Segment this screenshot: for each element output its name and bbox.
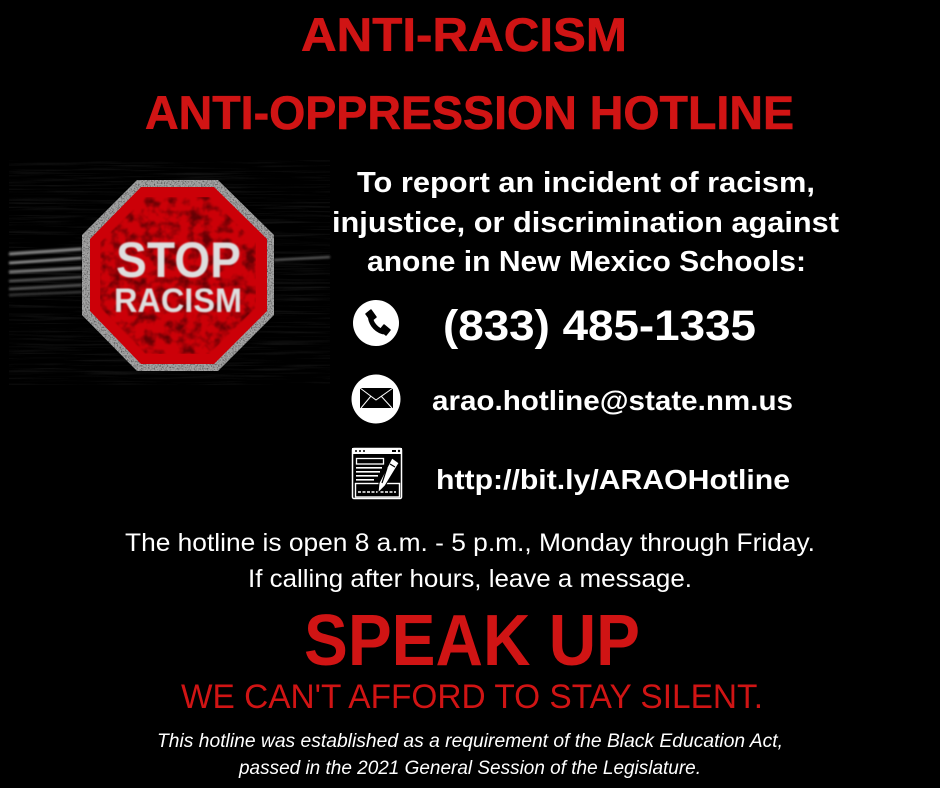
- hours text: If calling after hours, leave a message.: [248, 565, 692, 593]
- title: ANTI-RACISM: [301, 8, 627, 61]
- email: arao.hotline@state.nm.us: [432, 385, 793, 416]
- sign text: RACISM: [114, 282, 242, 320]
- intro text: anone in New Mexico Schools:: [367, 246, 806, 278]
- intro text: injustice, or discrimination against: [332, 207, 839, 239]
- octagon: [82, 180, 274, 371]
- icon: phone: [353, 300, 399, 346]
- title: ANTI-OPPRESSION HOTLINE: [145, 86, 794, 139]
- icon: envelope: [352, 374, 400, 424]
- title: [145, 8, 794, 139]
- footnote: This hotline was established as a requirement of the Black Education Act,: [157, 731, 783, 752]
- hours text: The hotline is open 8 a.m. - 5 p.m., Monday through Friday.: [125, 529, 815, 557]
- phone number: (833) 485-1335: [443, 302, 756, 350]
- image: stop racism sign: [9, 160, 330, 385]
- sign text: [114, 232, 242, 320]
- icon: web form and pencil: [352, 448, 402, 498]
- intro text: To report an incident of racism,: [357, 167, 815, 199]
- footnote: [157, 731, 783, 779]
- sign text: STOP: [116, 232, 241, 288]
- intro text: [332, 167, 839, 278]
- subheading: WE CAN'T AFFORD TO STAY SILENT.: [181, 678, 763, 716]
- speak up heading: SPEAK UP: [304, 601, 640, 681]
- footnote: passed in the 2021 General Session of the Legislature.: [238, 758, 701, 779]
- hours text: [125, 529, 815, 593]
- url: http://bit.ly/ARAOHotline: [436, 464, 790, 495]
- background streaks: [9, 160, 330, 385]
